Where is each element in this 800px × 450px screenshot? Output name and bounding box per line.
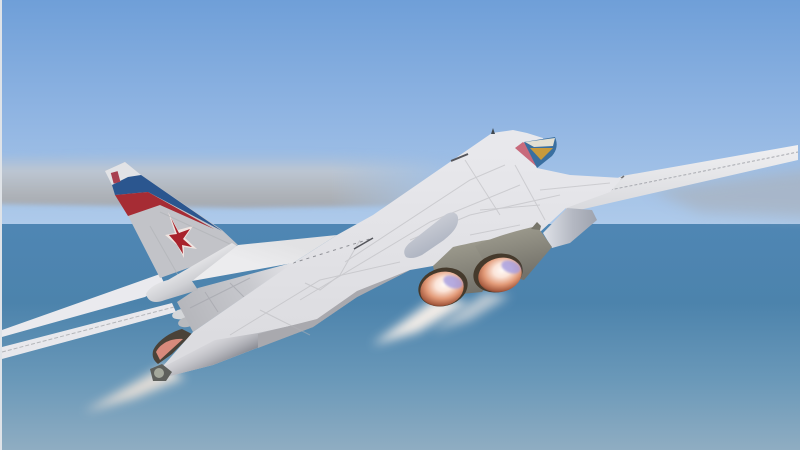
tail star (165, 212, 197, 258)
tail fin (105, 162, 238, 278)
sky (0, 0, 800, 224)
left frame edge (0, 0, 2, 450)
panel lines (230, 160, 610, 335)
sea (0, 224, 800, 450)
tail engine pod (146, 243, 240, 302)
tail engine cone (150, 364, 172, 381)
far engine exhaust glow (416, 267, 468, 311)
tail code (111, 171, 120, 184)
exhaust plumes (84, 292, 510, 412)
main wing and body (163, 130, 622, 376)
far engine nacelle (414, 238, 520, 312)
near engine exhaust glow (474, 253, 526, 297)
cockpit and nose markings (491, 128, 557, 168)
cloud band (0, 150, 800, 218)
lower fuselage shading (165, 270, 410, 376)
horizontal stabiliser (192, 235, 337, 281)
pods under tail (171, 307, 197, 329)
rear body behind engines (543, 208, 597, 248)
missile pod under wing (404, 213, 458, 258)
far engine nacelle behind fuselage (153, 329, 192, 364)
near engine nacelle (469, 222, 552, 298)
far wing (566, 145, 798, 211)
rear fuselage underside (177, 262, 295, 332)
aft swept wings (2, 274, 176, 359)
